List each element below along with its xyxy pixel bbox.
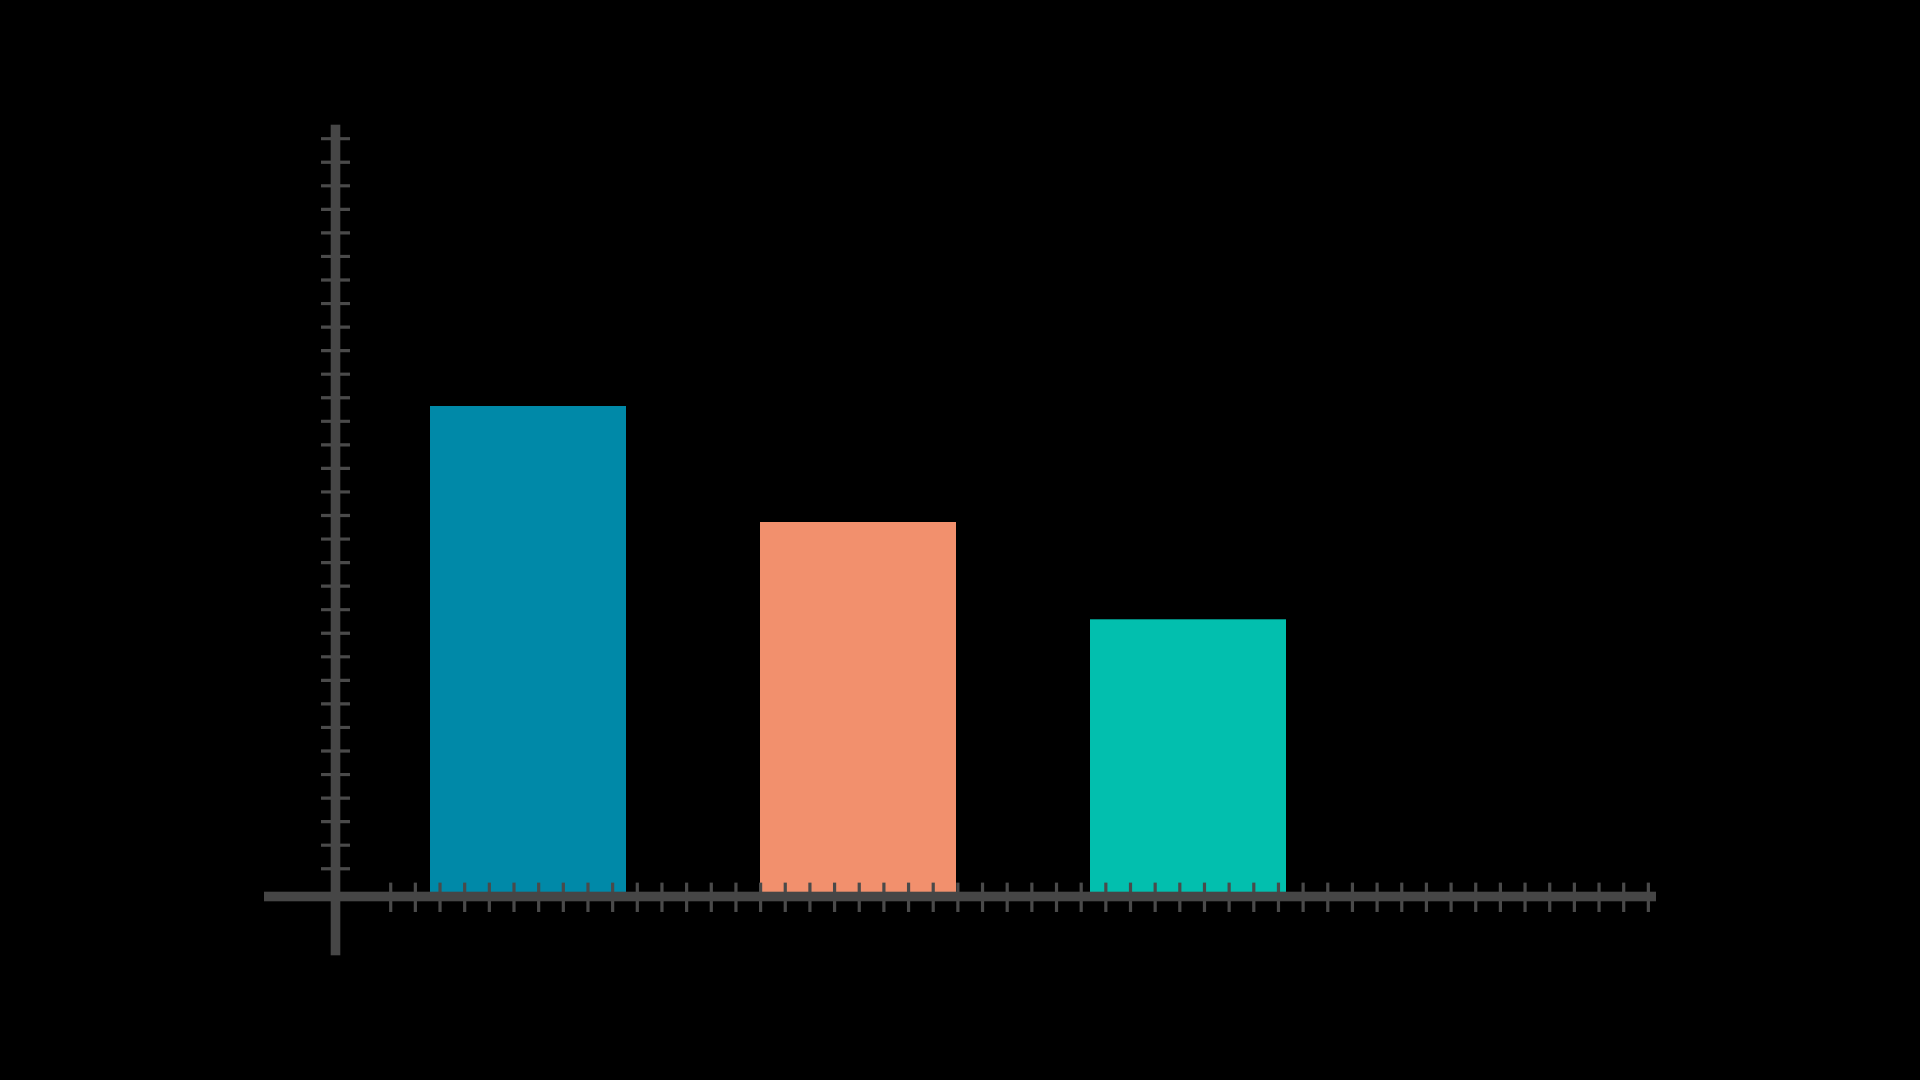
y axis tick marks: [321, 137, 350, 870]
x axis: [264, 892, 1656, 901]
bar: salmon: [760, 522, 956, 896]
y axis: [331, 125, 340, 955]
x axis tick marks: [389, 883, 1650, 912]
bar: blue: [430, 406, 626, 896]
bar: teal: [1090, 619, 1286, 896]
